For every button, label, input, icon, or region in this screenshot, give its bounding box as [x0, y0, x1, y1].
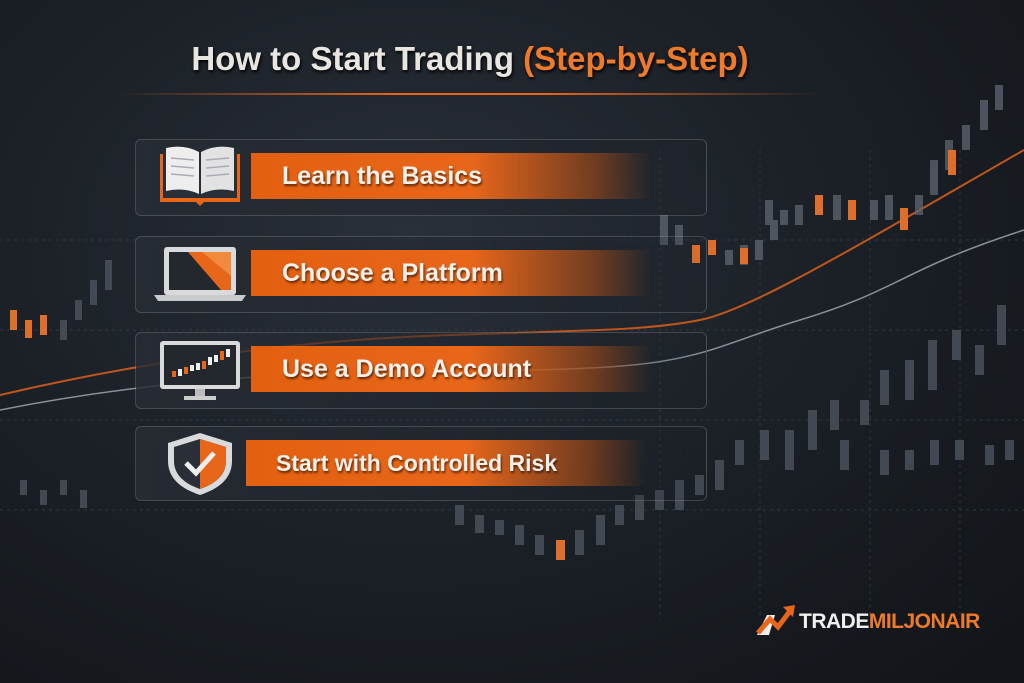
logo	[756, 605, 980, 635]
label: Learn the Basics	[282, 162, 482, 190]
panel: learn the basics	[135, 139, 707, 216]
wordmark: TRADEMILJONAIR	[799, 610, 980, 633]
title: How to Start Trading (Step-by-Step)	[191, 40, 749, 77]
icon: shield	[168, 433, 232, 495]
icon: monitor	[160, 341, 240, 400]
icon: arrow logo	[756, 605, 795, 635]
panel: demo account	[135, 332, 707, 409]
label: Start with Controlled Risk	[276, 450, 557, 476]
icon: open book	[160, 146, 240, 206]
label: Choose a Platform	[282, 259, 503, 287]
panel: choose a platform	[135, 236, 707, 313]
icon: laptop	[154, 247, 246, 301]
panel: controlled risk	[135, 426, 707, 501]
label: Use a Demo Account	[282, 355, 531, 383]
